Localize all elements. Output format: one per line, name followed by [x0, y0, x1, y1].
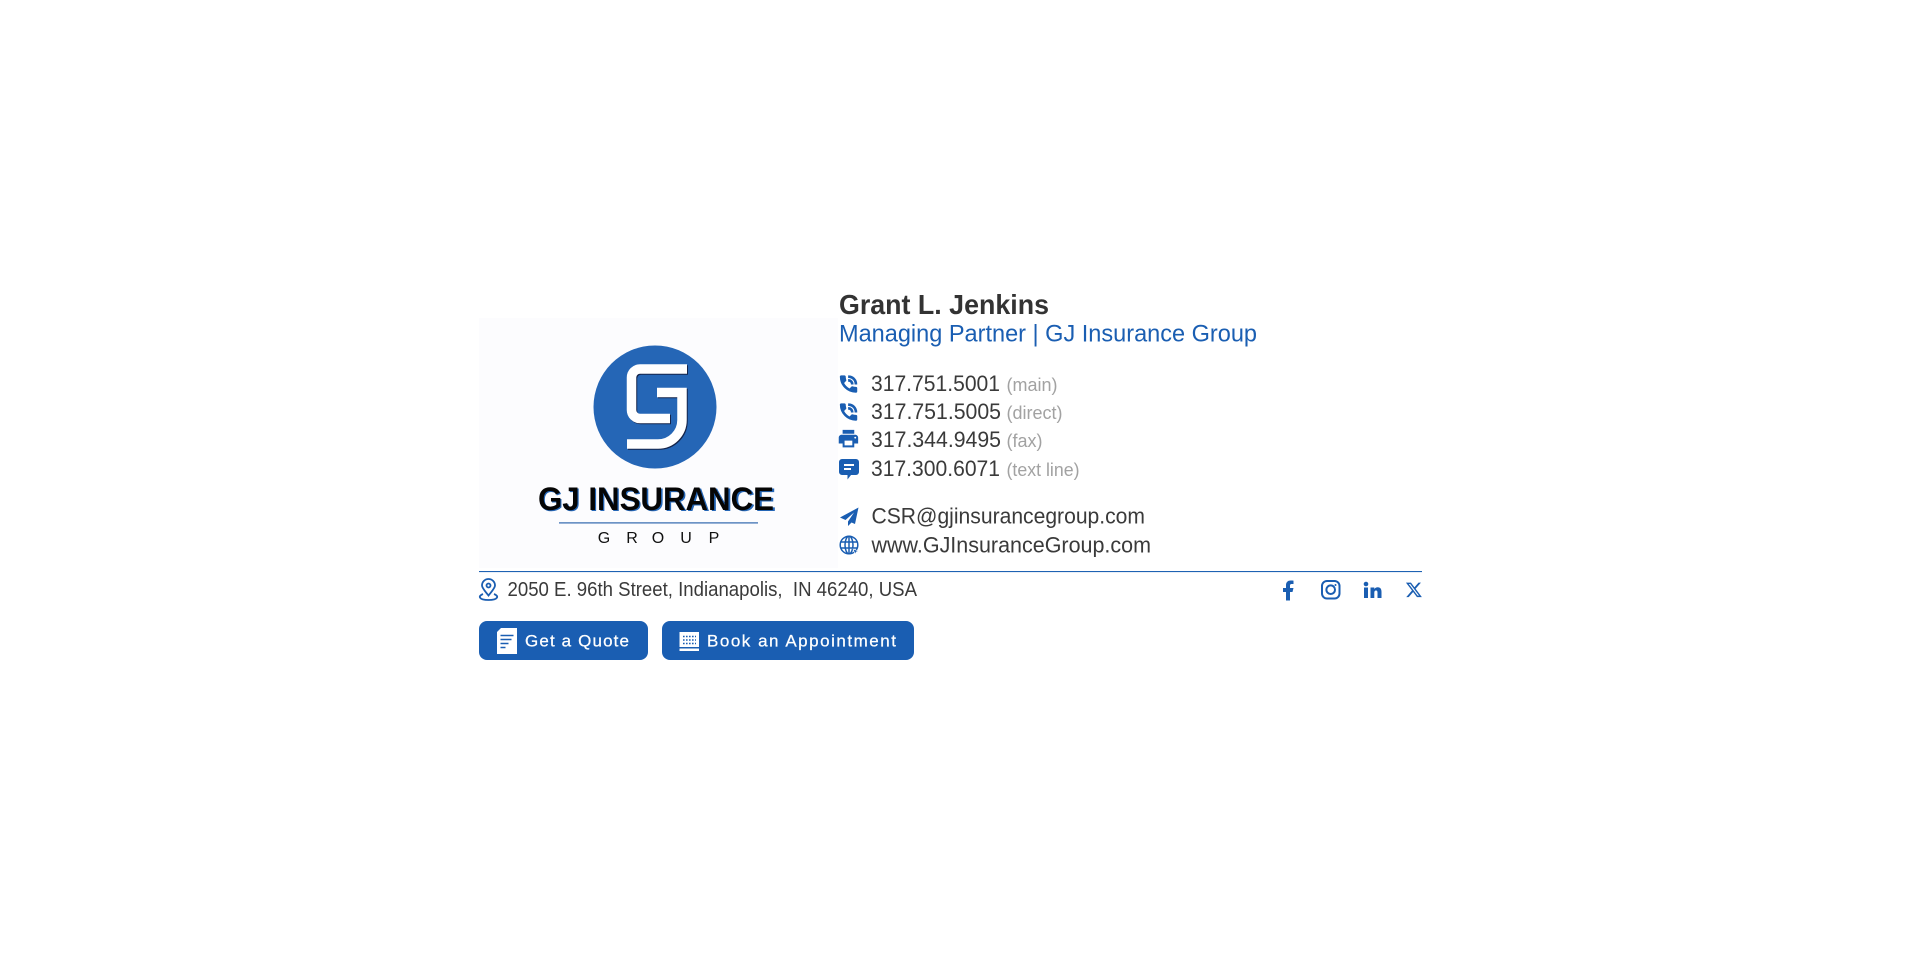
logo panel: [479, 318, 838, 568]
name: Grant L. Jenkins: [839, 289, 1049, 320]
icon: document: [497, 628, 517, 654]
logo badge: [594, 346, 716, 468]
phone: main: (main): [1006, 375, 1058, 395]
divider line: [479, 571, 1422, 572]
icon: location pin: [480, 579, 497, 600]
phone: main: 317.751.5001: [871, 371, 1000, 396]
social icons: [1283, 580, 1422, 600]
icon: globe: [840, 536, 858, 554]
icon: phone: [840, 404, 857, 420]
button: get a quote: Get a Quote: [525, 632, 629, 650]
logo wordmark: GJ INSURANCE: [538, 481, 774, 517]
icon: facebook: [1283, 580, 1294, 600]
logo subtitle: P: [709, 530, 719, 547]
logo rule: [559, 522, 758, 524]
icon: X: [1406, 583, 1422, 597]
phone: fax: (fax): [1006, 431, 1042, 451]
phone: direct: 317.751.5005: [871, 399, 1001, 424]
phone: fax: [839, 427, 1042, 452]
icon: paper plane: [840, 508, 858, 526]
phone: main: [840, 371, 1058, 396]
icon: instagram: [1322, 581, 1340, 598]
icon: calendar: [680, 632, 699, 651]
icon: printer: [839, 430, 858, 447]
logo subtitle: U: [680, 530, 692, 547]
job title: Managing Partner | GJ Insurance Group: [839, 320, 1257, 348]
address: 2050 E. 96th Street, Indianapolis, IN 46240, USA: [508, 579, 918, 601]
logo subtitle: G: [598, 530, 610, 547]
button: get a quote: [479, 621, 648, 660]
logo subtitle: [598, 530, 719, 547]
website: www.GJInsuranceGroup.com: [871, 532, 1151, 558]
phone: direct: (direct): [1006, 403, 1062, 423]
button: book an appointment: [662, 621, 914, 660]
icon: linkedin: [1364, 582, 1382, 598]
phone: text line: (text line): [1006, 460, 1080, 480]
phone: text line: 317.300.6071: [871, 456, 1000, 481]
logo wordmark: GJ INSURANCE: [539, 482, 776, 518]
phone: fax: 317.344.9495: [871, 427, 1001, 452]
icon: phone: [840, 376, 857, 392]
phone: direct: [840, 399, 1062, 424]
email: CSR@gjinsurancegroup.com: [872, 504, 1145, 528]
phone: text line: [839, 456, 1080, 481]
logo subtitle: R: [626, 530, 638, 547]
button: book an appointment: Book an Appointment: [707, 632, 896, 650]
logo subtitle: O: [652, 530, 664, 547]
icon: message: [839, 459, 859, 480]
